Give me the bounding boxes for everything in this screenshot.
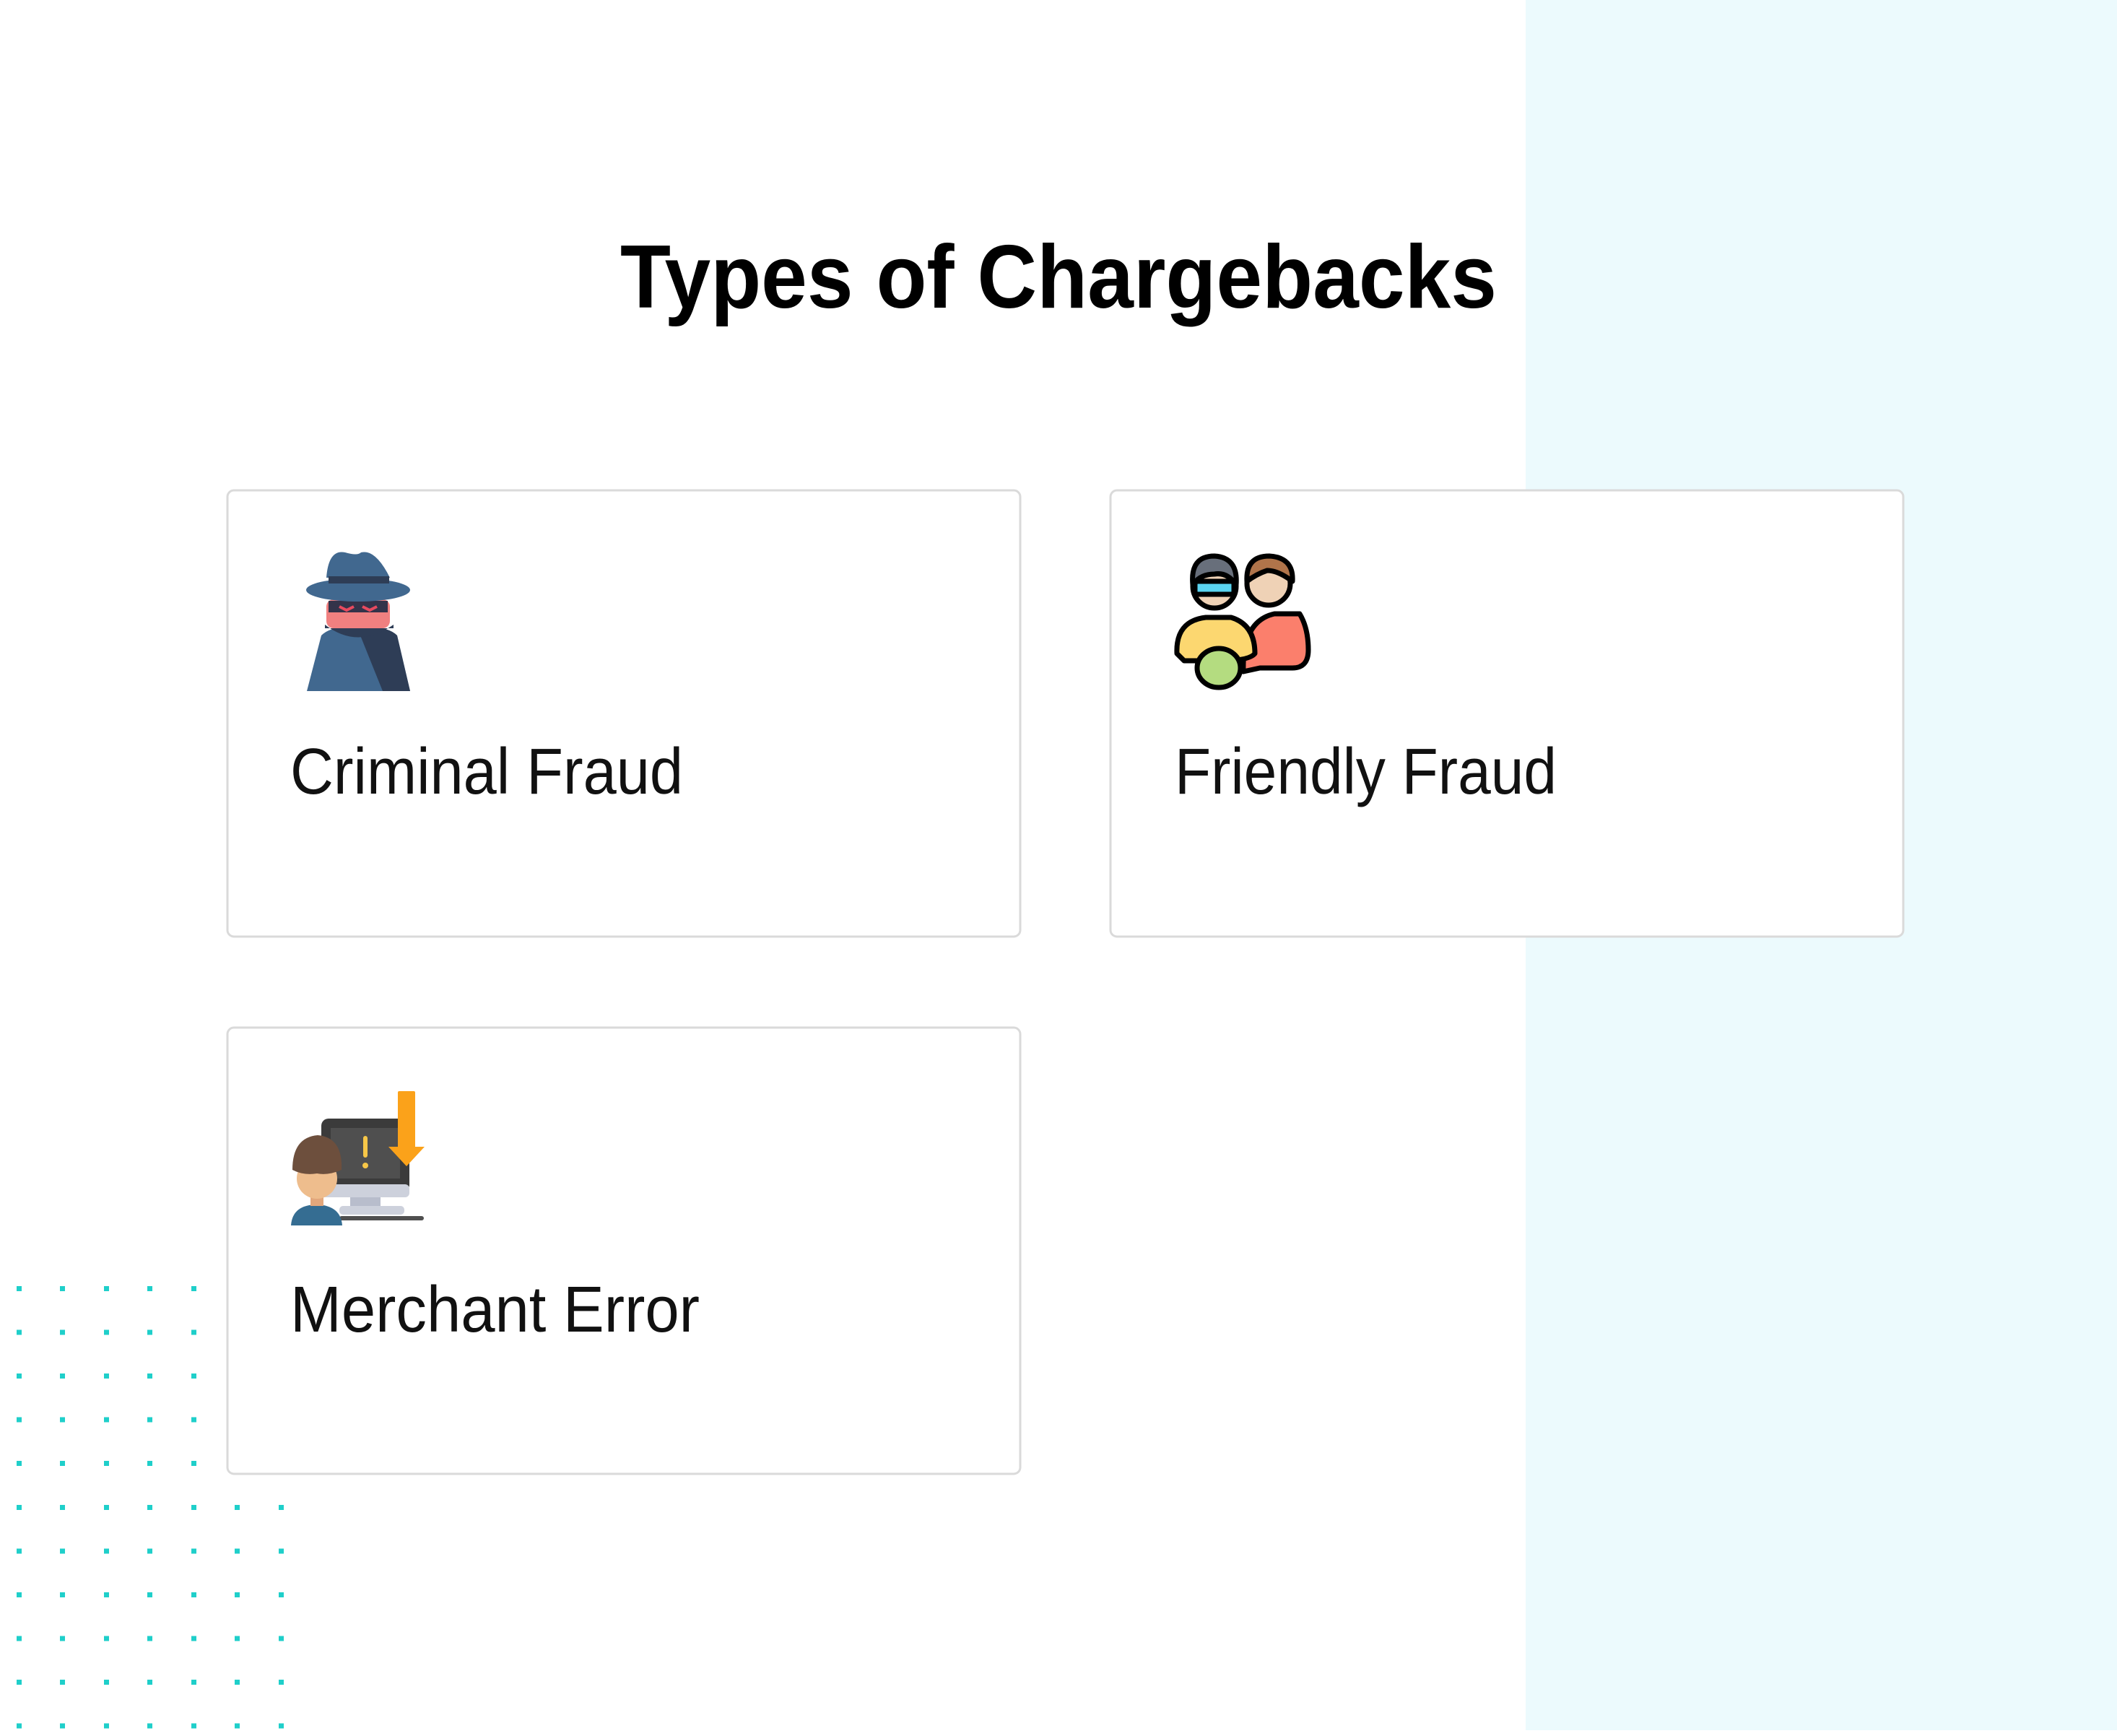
card: friendly fraud: [1110, 490, 1903, 937]
card: merchant error: [227, 1028, 1020, 1474]
light blue background panel: [1526, 0, 2117, 1730]
card: criminal fraud: [227, 490, 1020, 937]
icon: two people with money bag: [1177, 556, 1308, 687]
icon: merchant at computer: [291, 1091, 425, 1225]
icon: spy: [306, 552, 410, 691]
title: Types of Chargebacks: [620, 227, 1497, 327]
label: Criminal Fraud: [290, 736, 683, 808]
dotted pattern: [17, 1286, 284, 1729]
label: Friendly Fraud: [1175, 736, 1557, 808]
label: Merchant Error: [290, 1274, 700, 1346]
